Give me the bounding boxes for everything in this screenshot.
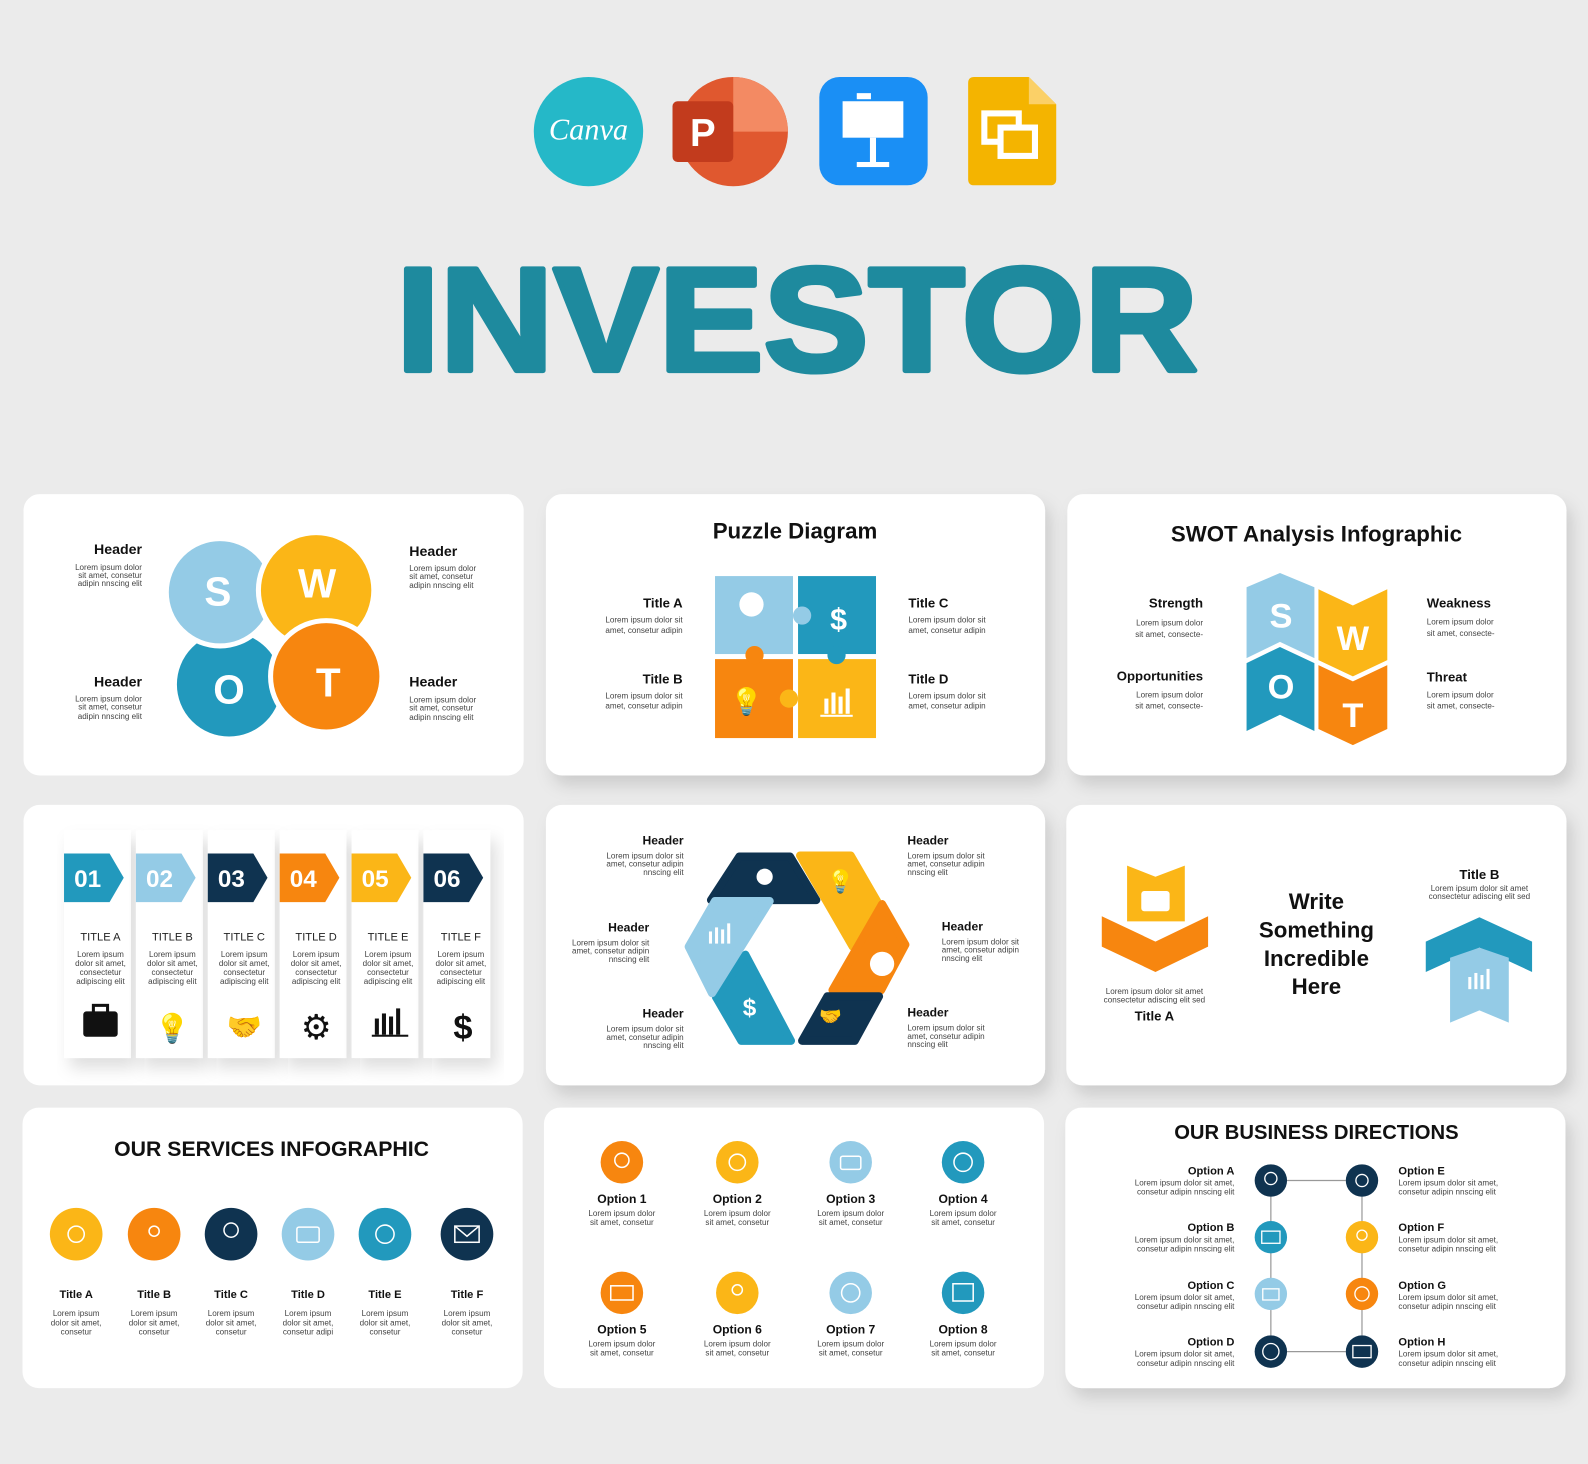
column text: TITLE E: [368, 932, 408, 944]
column icons: 🤝: [227, 1012, 262, 1044]
icon: keynote: [819, 77, 928, 185]
column text: TITLE D: [295, 932, 337, 944]
column text: adipiscing elit: [76, 977, 125, 986]
text blocks: sit amet, consetur: [78, 571, 142, 580]
direction labels: consetur adipin nnscing elit: [1398, 1359, 1497, 1368]
option labels: sit amet, consetur: [819, 1218, 883, 1227]
puzzle labels: amet, consetur adipin: [605, 626, 683, 635]
service labels: [51, 1289, 492, 1336]
option labels: Lorem ipsum dolor: [588, 1340, 656, 1349]
panel: puzzle diagram: [546, 494, 1045, 776]
panel: write something: [1066, 805, 1566, 1085]
service labels: Title C: [214, 1289, 248, 1301]
column text: [75, 932, 486, 986]
column icons: ⚙: [301, 1009, 332, 1047]
service labels: dolor sit amet,: [442, 1318, 492, 1327]
service labels: consetur: [216, 1327, 247, 1336]
text blocks: adipin nnscing elit: [409, 713, 474, 722]
service labels: consetur: [369, 1327, 401, 1336]
service labels: Title F: [451, 1289, 483, 1301]
direction labels: Lorem ipsum dolor sit amet,: [1135, 1293, 1234, 1302]
service labels: dolor sit amet,: [360, 1318, 410, 1327]
column text: Lorem ipsum: [293, 950, 340, 959]
center text: Here: [1292, 974, 1341, 999]
column text: consectetur: [440, 968, 482, 977]
letters: S: [204, 568, 231, 614]
option labels: Option 4: [938, 1192, 988, 1206]
panel: numbered steps: [24, 805, 524, 1085]
option circles: [601, 1141, 984, 1314]
service labels: dolor sit amet,: [283, 1318, 333, 1327]
puzzle labels: Title A: [643, 595, 683, 610]
option labels: Lorem ipsum dolor: [704, 1209, 771, 1218]
title a: Title A: [1135, 1009, 1175, 1024]
circles: [166, 533, 382, 739]
hexagon segments: $: [743, 994, 757, 1021]
letters: W: [298, 560, 337, 606]
swot chevrons: W: [1337, 620, 1370, 658]
panel: swot circles: [24, 494, 524, 776]
direction labels: Option A: [1188, 1165, 1234, 1177]
service labels: consetur: [61, 1327, 92, 1336]
text blocks: sit amet, consetur: [78, 703, 142, 712]
letters: O: [213, 667, 245, 713]
hexagon labels: Header: [907, 833, 949, 847]
hexagon labels: Lorem ipsum dolor sit: [572, 939, 650, 948]
direction labels: consetur adipin nnscing elit: [1137, 1359, 1235, 1368]
direction labels: Option B: [1187, 1222, 1234, 1234]
option labels: Option 1: [597, 1192, 647, 1206]
direction labels: consetur adipin nnscing elit: [1398, 1244, 1497, 1253]
swot chevrons: S: [1270, 598, 1292, 636]
column text: TITLE F: [441, 932, 481, 944]
puzzle labels: Lorem ipsum dolor sit: [908, 692, 986, 701]
number tags: 02: [146, 866, 173, 893]
swot labels: Strength: [1149, 595, 1203, 610]
icon: canva: [534, 77, 643, 186]
puzzle labels: Lorem ipsum dolor sit: [908, 616, 986, 625]
direction labels: consetur adipin nnscing elit: [1137, 1188, 1235, 1197]
swot chevrons: O: [1268, 669, 1294, 707]
swot labels: sit amet, consecte-: [1135, 630, 1203, 639]
column text: dolor sit amet,: [291, 959, 341, 968]
direction labels: Option H: [1398, 1337, 1445, 1349]
service labels: Title D: [291, 1289, 325, 1301]
column text: adipiscing elit: [437, 977, 486, 986]
text blocks: Header: [409, 544, 458, 560]
icon: google slides: [968, 77, 1056, 185]
column text: dolor sit amet,: [436, 959, 486, 968]
swot labels: sit amet, consecte-: [1427, 702, 1495, 711]
icon: canva: Canva: [549, 113, 628, 147]
service labels: consetur: [451, 1327, 483, 1336]
connector diagram: [1255, 1164, 1378, 1368]
hexagon labels: amet, consetur adipin: [606, 860, 684, 869]
text blocks: Header: [94, 542, 142, 558]
column text: consectetur: [367, 968, 409, 977]
swot chevrons: [1247, 573, 1387, 745]
text blocks: [75, 542, 476, 722]
column text: Lorem ipsum: [149, 950, 196, 959]
title a: [1104, 987, 1205, 1024]
puzzle pieces: $: [830, 604, 847, 637]
panel: swot analysis: [1067, 494, 1566, 776]
panel: hexagon cycle: [546, 805, 1045, 1085]
option labels: Lorem ipsum dolor: [588, 1209, 656, 1218]
title b: consectetur adiscing elit sed: [1429, 892, 1530, 901]
text blocks: Header: [409, 674, 458, 690]
center text: [1259, 889, 1374, 999]
service labels: dolor sit amet,: [129, 1318, 179, 1327]
hexagon labels: nnscing elit: [643, 868, 684, 877]
hexagon labels: Lorem ipsum dolor sit: [942, 938, 1020, 947]
column text: Lorem ipsum: [365, 950, 412, 959]
center text: Something: [1259, 918, 1374, 943]
panel: our services: [23, 1108, 523, 1388]
hexagon labels: Lorem ipsum dolor sit: [907, 852, 985, 861]
puzzle labels: Lorem ipsum dolor sit: [605, 616, 683, 625]
icon: powerpoint: P: [690, 112, 716, 155]
column text: consectetur: [80, 968, 122, 977]
hexagon labels: Header: [643, 833, 684, 847]
option labels: sit amet, consetur: [705, 1349, 769, 1358]
puzzle pieces: [715, 576, 876, 738]
puzzle labels: Title C: [908, 595, 949, 610]
center text: Write: [1289, 889, 1344, 914]
option labels: Option 5: [597, 1322, 647, 1336]
number tags: 06: [434, 866, 461, 893]
column text: Lorem ipsum: [438, 950, 485, 959]
column text: consectetur: [151, 968, 194, 977]
swot labels: sit amet, consecte-: [1135, 702, 1203, 711]
option labels: sit amet, consetur: [705, 1218, 769, 1227]
direction labels: Option E: [1398, 1165, 1445, 1177]
option labels: [588, 1192, 997, 1358]
panel: puzzle diagram: Puzzle Diagram: [713, 519, 877, 544]
hexagon labels: nnscing elit: [643, 1041, 684, 1050]
panel: our services: OUR SERVICES INFOGRAPHIC: [114, 1137, 429, 1161]
swot labels: Lorem ipsum dolor: [1136, 691, 1203, 700]
service labels: Lorem ipsum: [53, 1309, 100, 1318]
hexagon labels: Header: [643, 1007, 684, 1021]
option labels: Option 2: [713, 1192, 762, 1206]
hexagon segments: 💡: [827, 868, 854, 894]
puzzle labels: Title B: [643, 671, 683, 686]
option labels: sit amet, consetur: [931, 1349, 995, 1358]
number tags: 04: [290, 866, 317, 893]
number tags: [64, 853, 483, 902]
service labels: Title B: [137, 1289, 171, 1301]
text blocks: Lorem ipsum dolor: [75, 563, 142, 572]
panel: swot analysis: SWOT Analysis Infographic: [1171, 522, 1462, 547]
hexagon segments: 🤝: [819, 1007, 842, 1027]
direction labels: [1135, 1165, 1498, 1368]
hexagon segments: [689, 856, 905, 1041]
text blocks: adipin nnscing elit: [78, 579, 143, 588]
up arrow: [1426, 917, 1532, 1023]
swot labels: Lorem ipsum dolor: [1427, 691, 1494, 700]
hexagon labels: Header: [608, 920, 649, 934]
direction labels: consetur adipin nnscing elit: [1398, 1302, 1497, 1311]
direction labels: Option G: [1398, 1280, 1446, 1292]
column text: consectetur: [295, 968, 337, 977]
option labels: Lorem ipsum dolor: [930, 1340, 997, 1349]
number tags: 01: [74, 866, 101, 893]
option labels: Option 3: [826, 1192, 876, 1206]
column text: Lorem ipsum: [221, 950, 268, 959]
service labels: Lorem ipsum: [131, 1309, 178, 1318]
option labels: Lorem ipsum dolor: [817, 1340, 884, 1349]
service labels: dolor sit amet,: [51, 1318, 102, 1327]
title b: Lorem ipsum dolor sit amet: [1431, 884, 1529, 893]
hexagon labels: nnscing elit: [907, 1040, 949, 1049]
option labels: Lorem ipsum dolor: [930, 1209, 997, 1218]
column text: adipiscing elit: [148, 977, 197, 986]
column text: adipiscing elit: [292, 977, 341, 986]
option labels: sit amet, consetur: [590, 1349, 654, 1358]
title a: Lorem ipsum dolor sit amet: [1106, 987, 1204, 996]
text blocks: Header: [94, 674, 142, 690]
swot labels: Opportunities: [1117, 668, 1203, 683]
hexagon labels: amet, consetur adipin: [907, 1032, 985, 1041]
swot labels: Threat: [1427, 669, 1468, 684]
column text: consectetur: [223, 968, 265, 977]
service labels: dolor sit amet,: [206, 1318, 256, 1327]
column text: dolor sit amet,: [147, 959, 198, 968]
column text: TITLE A: [80, 932, 121, 944]
hexagon labels: [572, 833, 1020, 1050]
hexagon labels: Header: [907, 1005, 949, 1019]
puzzle pieces: 💡: [730, 687, 763, 717]
column text: TITLE B: [152, 932, 193, 944]
swot labels: sit amet, consecte-: [1427, 629, 1495, 638]
service labels: Title E: [368, 1289, 402, 1301]
hexagon labels: amet, consetur adipin: [572, 947, 649, 956]
hexagon labels: nnscing elit: [907, 868, 949, 877]
direction labels: consetur adipin nnscing elit: [1137, 1302, 1235, 1311]
option labels: Option 8: [938, 1322, 988, 1336]
panel: business directions: [1065, 1108, 1565, 1388]
service labels: Lorem ipsum: [285, 1309, 332, 1318]
column text: Lorem ipsum: [77, 950, 124, 959]
hexagon labels: Header: [942, 919, 983, 933]
hexagon labels: Lorem ipsum dolor sit: [606, 1025, 684, 1034]
puzzle labels: Lorem ipsum dolor sit: [605, 692, 683, 701]
column text: TITLE C: [224, 932, 265, 944]
center text: Incredible: [1264, 946, 1369, 971]
service labels: Lorem ipsum: [362, 1309, 409, 1318]
service labels: consetur adipi: [283, 1327, 333, 1336]
letters: [204, 560, 341, 713]
panel: business directions: OUR BUSINESS DIRECTIONS: [1174, 1122, 1459, 1144]
option labels: sit amet, consetur: [931, 1218, 995, 1227]
hexagon labels: amet, consetur adipin: [907, 860, 985, 869]
option labels: Lorem ipsum dolor: [817, 1209, 884, 1218]
direction labels: Lorem ipsum dolor sit amet,: [1398, 1350, 1498, 1359]
hexagon labels: amet, consetur adipin: [942, 946, 1019, 955]
direction labels: Lorem ipsum dolor sit amet,: [1135, 1350, 1234, 1359]
puzzle labels: amet, consetur adipin: [908, 626, 986, 635]
text blocks: adipin nnscing elit: [78, 712, 143, 721]
panel: options: [544, 1108, 1044, 1388]
column text: adipiscing elit: [220, 977, 269, 986]
swot chevrons: T: [1342, 697, 1363, 735]
swot labels: Lorem ipsum dolor: [1136, 619, 1203, 628]
service labels: Title A: [59, 1289, 93, 1301]
direction labels: Lorem ipsum dolor sit amet,: [1398, 1179, 1498, 1188]
puzzle labels: Title D: [908, 671, 948, 686]
column strips: [64, 830, 490, 1058]
icon: powerpoint: [673, 77, 788, 186]
column text: adipiscing elit: [364, 977, 413, 986]
number tags: 05: [362, 866, 389, 893]
text blocks: Lorem ipsum dolor: [75, 695, 142, 704]
service labels: Lorem ipsum: [444, 1309, 491, 1318]
column icons: $: [453, 1009, 472, 1047]
hexagon labels: Lorem ipsum dolor sit: [606, 852, 684, 861]
column text: dolor sit amet,: [363, 959, 413, 968]
title b: Title B: [1459, 867, 1499, 882]
direction labels: consetur adipin nnscing elit: [1137, 1244, 1235, 1253]
text blocks: Lorem ipsum dolor: [409, 564, 476, 573]
number tags: 03: [218, 866, 245, 893]
direction labels: Option F: [1398, 1222, 1444, 1234]
direction labels: Lorem ipsum dolor sit amet,: [1398, 1235, 1498, 1244]
swot labels: Lorem ipsum dolor: [1427, 618, 1494, 627]
column text: dolor sit amet,: [219, 959, 270, 968]
direction labels: Lorem ipsum dolor sit amet,: [1135, 1235, 1234, 1244]
letters: T: [316, 660, 341, 706]
hexagon labels: amet, consetur adipin: [606, 1033, 684, 1042]
direction labels: Lorem ipsum dolor sit amet,: [1135, 1179, 1234, 1188]
title a: consectetur adiscing elit sed: [1104, 995, 1205, 1004]
text blocks: Lorem ipsum dolor: [409, 696, 476, 705]
hexagon labels: nnscing elit: [609, 955, 650, 964]
puzzle labels: [605, 595, 986, 711]
text blocks: sit amet, consetur: [409, 704, 473, 713]
title: INVESTOR: [396, 238, 1198, 403]
option labels: sit amet, consetur: [819, 1349, 883, 1358]
hexagon labels: Lorem ipsum dolor sit: [907, 1024, 985, 1033]
title b: [1429, 867, 1530, 901]
text blocks: sit amet, consetur: [409, 572, 473, 581]
swot labels: Weakness: [1427, 595, 1491, 610]
direction labels: consetur adipin nnscing elit: [1398, 1188, 1497, 1197]
option labels: sit amet, consetur: [590, 1218, 654, 1227]
service labels: Lorem ipsum: [208, 1309, 255, 1318]
swot labels: [1117, 595, 1495, 711]
option labels: Lorem ipsum dolor: [704, 1340, 771, 1349]
option labels: Option 6: [713, 1322, 762, 1336]
direction labels: Option D: [1187, 1337, 1234, 1349]
service labels: consetur: [139, 1327, 170, 1336]
service circles: [50, 1208, 493, 1260]
column text: dolor sit amet,: [75, 959, 126, 968]
puzzle labels: amet, consetur adipin: [605, 702, 683, 711]
option labels: Option 7: [826, 1322, 876, 1336]
direction labels: Lorem ipsum dolor sit amet,: [1398, 1293, 1498, 1302]
hexagon labels: nnscing elit: [942, 954, 983, 963]
puzzle labels: amet, consetur adipin: [908, 702, 986, 711]
text blocks: adipin nnscing elit: [409, 581, 474, 590]
direction labels: Option C: [1187, 1280, 1234, 1292]
column icons: [83, 1005, 472, 1047]
down arrow: [1102, 866, 1208, 972]
column icons: 💡: [155, 1012, 190, 1045]
